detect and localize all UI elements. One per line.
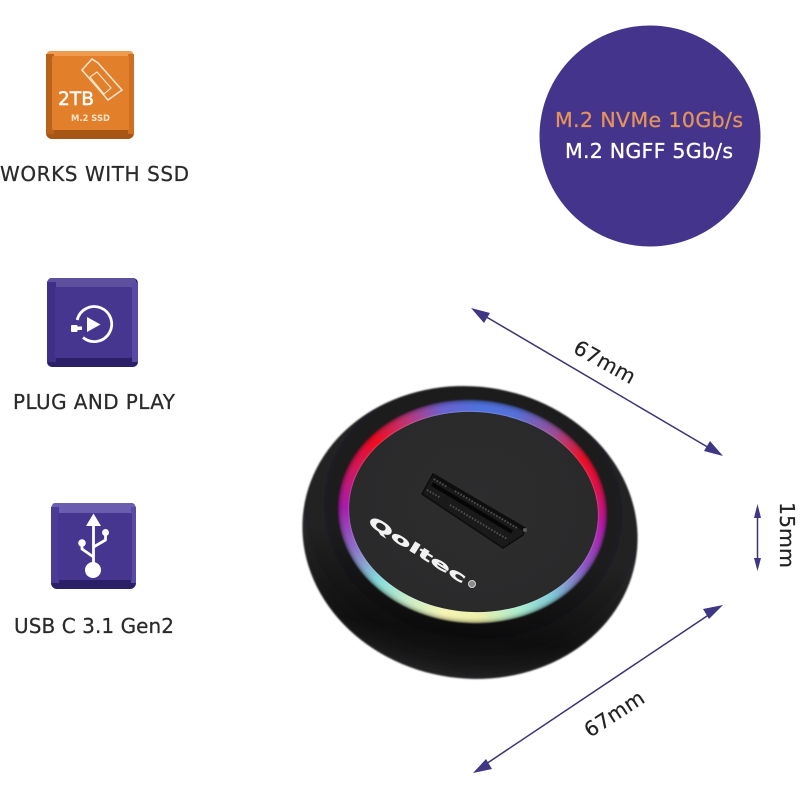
arrow: top 67mm [471,308,723,456]
dimension: top 67mm: 67mm [570,335,640,389]
icon: 2TB M.2 SSD: M.2 SSD [71,114,110,124]
Qoltec logo [365,514,476,588]
arrow: height 15mm [754,504,761,571]
device body [283,365,657,700]
speed badge [540,26,760,246]
icon: 2TB M.2 SSD [46,51,134,139]
label: plug and play: PLUG AND PLAY [13,390,176,414]
icon: USB [51,503,136,589]
dimension: bottom 67mm: 67mm [580,686,649,742]
icon: plug and play [47,278,138,367]
arrow: bottom 67mm [473,605,723,773]
top surface [342,404,605,620]
icon: 2TB M.2 SSD: 2TB [58,88,94,110]
M.2 connector slot [422,474,527,548]
label: works with SSD: WORKS WITH SSD [0,162,189,186]
device: docking station [301,384,639,680]
RGB ring [331,391,614,632]
badge text: NVMe speed: M.2 NVMe 10Gb/s [555,108,743,132]
badge text: NGFF speed: M.2 NGFF 5Gb/s [565,139,733,163]
label: USB C 3.1 Gen2: USB C 3.1 Gen2 [14,614,174,638]
Qoltec logo: Qoltec [365,514,469,587]
dimension: height 15mm: 15mm [775,502,799,568]
